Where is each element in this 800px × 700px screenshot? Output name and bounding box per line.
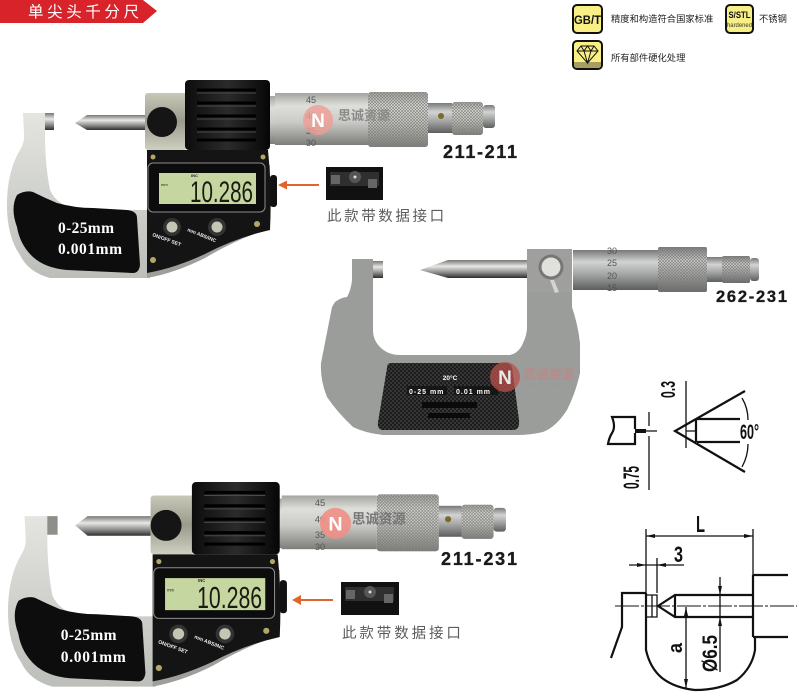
caption: data port: 此款带数据接口 bbox=[342, 625, 464, 642]
barrel and thimble: 20 bbox=[607, 271, 617, 281]
dimension a bbox=[665, 607, 688, 688]
data port photo bbox=[341, 582, 399, 615]
LCD display: 10.286 bbox=[197, 580, 262, 615]
buttons bbox=[156, 559, 275, 671]
lock knob bbox=[147, 107, 177, 137]
micrometer 211-231 bbox=[8, 482, 506, 687]
range plate bbox=[14, 191, 140, 273]
frame bbox=[8, 516, 156, 687]
data port photo bbox=[326, 167, 383, 200]
data port nub bbox=[270, 175, 277, 207]
square anvil bbox=[47, 516, 58, 535]
angle arc bbox=[742, 398, 748, 467]
micrometer 211-211 bbox=[7, 80, 495, 278]
dimension diameter 6.5: Ø6.5 bbox=[699, 635, 722, 672]
digital body bbox=[153, 554, 280, 681]
contact point box bbox=[646, 595, 657, 617]
black counter head bbox=[185, 80, 270, 150]
range plate: 0.001mm bbox=[61, 649, 126, 666]
range plate: 0-25 mm bbox=[409, 389, 444, 396]
barrel and thimble: 40 bbox=[306, 111, 316, 121]
data port nub bbox=[280, 580, 287, 613]
barrel and thimble: 15 bbox=[607, 283, 617, 293]
dimension 0.3: 0.3 bbox=[658, 381, 680, 398]
stem and dimension lines bbox=[635, 429, 646, 433]
anvil bbox=[373, 261, 383, 278]
3 dimension: 3 bbox=[674, 542, 683, 567]
watermark bbox=[320, 508, 406, 539]
LCD display: mm bbox=[161, 182, 168, 187]
thimble lines bbox=[753, 575, 788, 637]
barrel and thimble: 45 bbox=[306, 95, 316, 105]
black counter head bbox=[192, 482, 280, 554]
range plate: 0-25mm bbox=[61, 627, 117, 644]
icon: hardened diamond bbox=[573, 41, 602, 69]
range plate: 20°C bbox=[443, 374, 458, 382]
model number 262-231: 262-231 bbox=[716, 288, 787, 306]
watermark bbox=[490, 362, 575, 392]
3 dimension bbox=[629, 542, 684, 593]
watermark: WWW.SCZY.COM bbox=[523, 383, 564, 389]
range plate bbox=[378, 363, 519, 430]
micrometer 262-231 bbox=[321, 246, 759, 435]
watermark: 思诚资源 bbox=[523, 367, 575, 382]
barrel and thimble bbox=[274, 494, 506, 552]
pointed spindle bbox=[658, 595, 753, 617]
model number 211-231: 211-231 bbox=[441, 549, 517, 569]
barrel and thimble: 35 bbox=[315, 530, 325, 540]
pointed spindle bbox=[75, 115, 147, 130]
watermark: N bbox=[311, 111, 325, 132]
lock knob bbox=[151, 510, 182, 541]
LCD display: INC bbox=[198, 578, 205, 583]
buttons: ON/OFF SET bbox=[151, 232, 182, 248]
LCD display: INC bbox=[191, 173, 198, 178]
barrel and thimble bbox=[268, 92, 495, 148]
barrel and thimble bbox=[573, 246, 759, 293]
caption: data port: 此款带数据接口 bbox=[327, 208, 447, 225]
digital body bbox=[147, 150, 271, 273]
title banner bbox=[0, 0, 157, 23]
LCD display bbox=[154, 568, 275, 618]
barrel and thimble: 25 bbox=[607, 258, 617, 268]
pointed spindle bbox=[75, 516, 151, 536]
title banner: 单尖头千分尺 bbox=[28, 3, 143, 21]
model number 211-211: 211-211 bbox=[443, 142, 517, 162]
dimension diagram bbox=[611, 511, 797, 690]
arrow to data port bbox=[278, 180, 319, 190]
range plate: 0-25mm bbox=[58, 220, 114, 237]
dimension diameter 6.5 bbox=[699, 577, 722, 672]
buttons: mm ABS/INC bbox=[186, 227, 217, 244]
dimension 0.75: 0.75 bbox=[619, 466, 644, 489]
barrel and thimble: 40 bbox=[315, 514, 325, 524]
dimension a: a bbox=[665, 642, 687, 653]
center line bbox=[615, 605, 797, 607]
buttons: mm ABS/INC bbox=[193, 634, 225, 652]
LCD display: mm bbox=[167, 588, 175, 593]
barrel and thimble: 30 bbox=[306, 138, 316, 148]
text: hardened parts note: 所有部件硬化处理 bbox=[611, 52, 685, 63]
text: accuracy standard note: 精度和构造符合国家标准 bbox=[611, 13, 713, 24]
frame arc bbox=[646, 593, 755, 690]
angle 60 degrees: 60° bbox=[740, 421, 759, 444]
range plate: 0.01 mm bbox=[456, 389, 491, 396]
watermark: N bbox=[498, 368, 512, 389]
L dimension bbox=[646, 511, 753, 593]
L dimension: L bbox=[696, 511, 705, 537]
point outline bbox=[675, 391, 745, 472]
watermark: N bbox=[328, 514, 343, 536]
icon: S/STL hardened: S/STL bbox=[728, 10, 751, 21]
barrel and thimble: 45 bbox=[315, 498, 325, 508]
fixed anvil bbox=[45, 113, 54, 130]
frame bbox=[7, 113, 150, 278]
icon: GB/T standard: GB/T bbox=[574, 15, 601, 27]
watermark: 思诚资源 bbox=[352, 510, 406, 526]
anvil outline bbox=[611, 593, 646, 658]
lock collar bbox=[151, 495, 194, 554]
barrel and thimble: 35 bbox=[306, 126, 316, 136]
watermark bbox=[303, 105, 390, 135]
barrel and thimble: 30 bbox=[607, 246, 617, 256]
watermark: 思诚资源 bbox=[338, 108, 390, 123]
icon: S/STL hardened: hardened bbox=[727, 22, 752, 29]
collar bbox=[527, 249, 572, 292]
arrow to data port bbox=[292, 595, 333, 605]
text: stainless steel note: 不锈钢 bbox=[759, 13, 787, 24]
LCD display: 10.286 bbox=[190, 176, 253, 209]
frame bbox=[321, 259, 580, 435]
lock collar bbox=[145, 93, 187, 150]
buttons: ON/OFF SET bbox=[157, 639, 189, 656]
contact block bbox=[608, 417, 635, 444]
lock clamp bbox=[538, 254, 564, 293]
icon: S/STL hardened bbox=[726, 5, 753, 33]
buttons bbox=[150, 154, 266, 263]
barrel and thimble: 30 bbox=[315, 542, 325, 552]
range plate bbox=[15, 597, 145, 681]
range plate: 0.001mm bbox=[58, 241, 122, 258]
tip detail diagram bbox=[608, 381, 759, 490]
pointed spindle bbox=[420, 260, 527, 278]
LCD display bbox=[148, 163, 265, 212]
icon: GB/T standard bbox=[573, 5, 602, 33]
